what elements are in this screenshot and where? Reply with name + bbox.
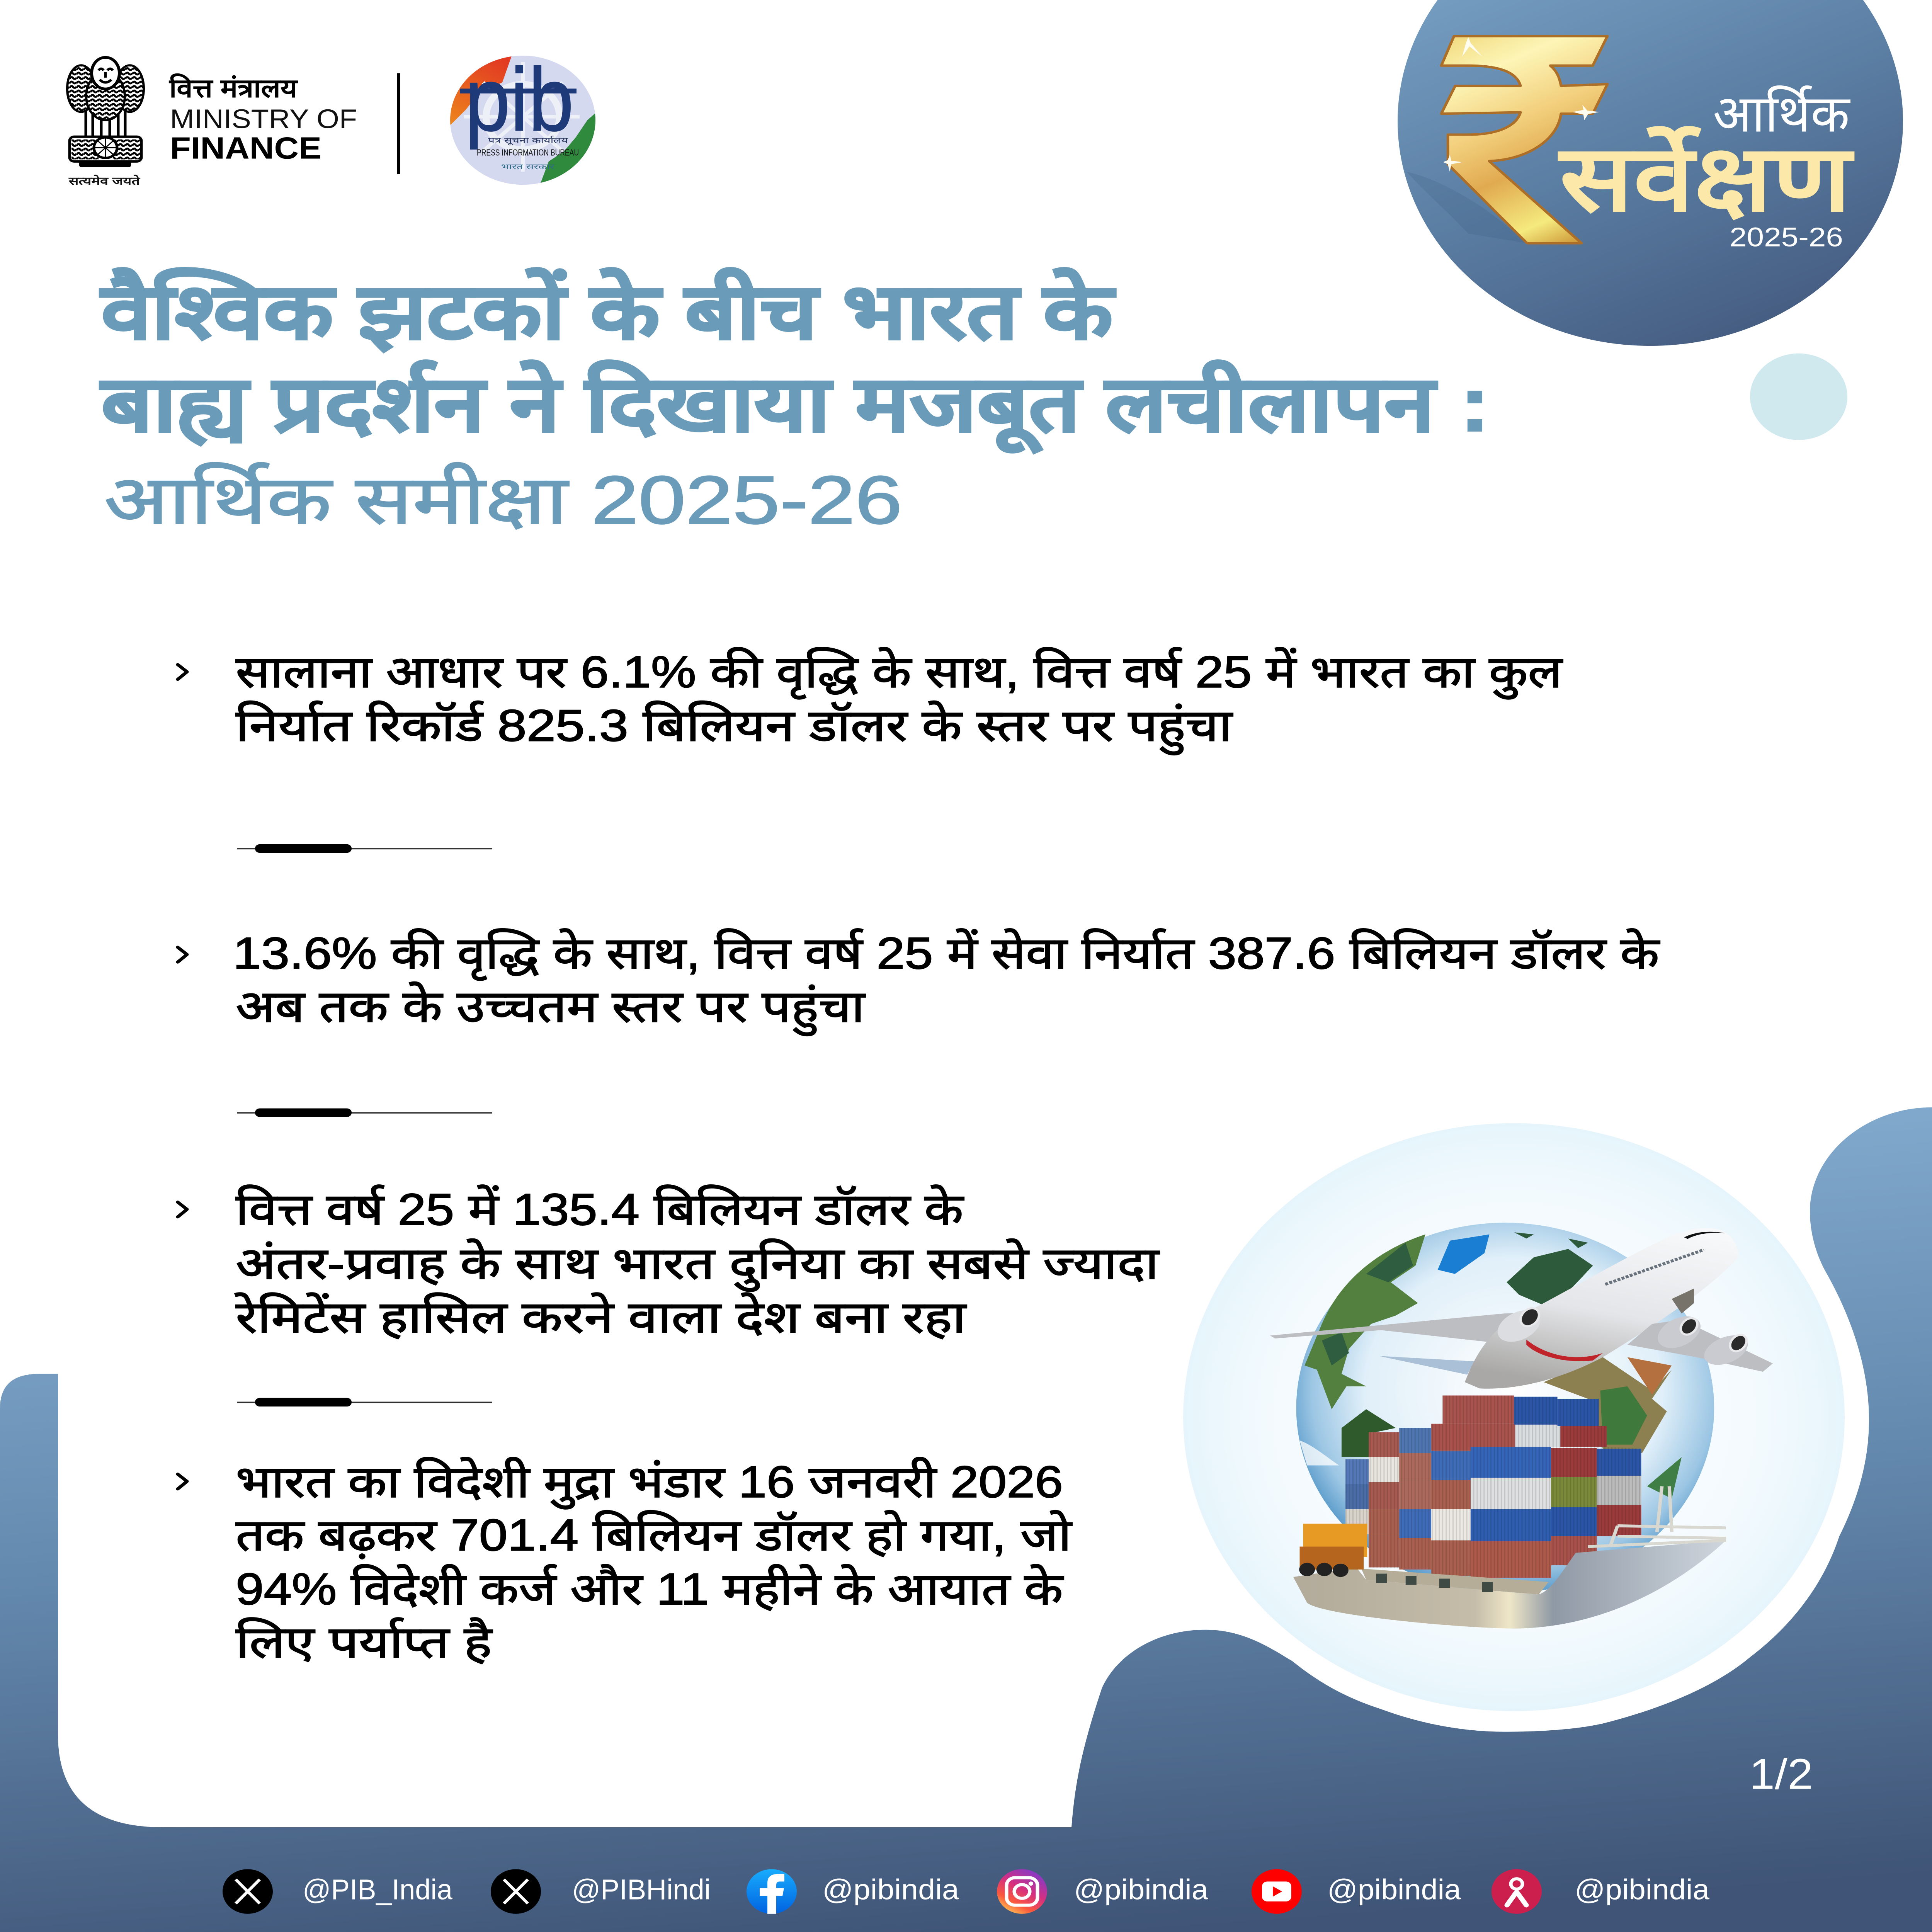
handle: @pibindia: @pibindia <box>1327 1873 1461 1906</box>
bullet 4: forex reserves: लिए पर्याप्त है <box>236 1617 493 1667</box>
text: PRESS INFORMATION BUREAU: PRESS INFORMATION BUREAU <box>477 148 579 158</box>
icon: globe <box>1296 1223 1714 1593</box>
decorative pale circle <box>1750 354 1847 440</box>
icon: facebook <box>747 1869 797 1914</box>
bullet 1: total exports: सालाना आधार पर 6.1% की वृद्धि के साथ, वित्त वर्ष 25 में भारत का कुल <box>236 647 1563 699</box>
footer: social handles <box>223 1869 1710 1914</box>
bullet 3: remittances: अंतर-प्रवाह के साथ भारत दुनिया का सबसे ज्यादा <box>236 1238 1160 1292</box>
bullet 4: forex reserves: तक बढ़कर 701.4 बिलियन डॉलर हो गया, जो <box>236 1510 1072 1560</box>
text: पत्र सूचना कार्यालय: पत्र सूचना कार्यालय <box>488 136 568 146</box>
icon: X <box>491 1869 541 1914</box>
bullet 3: remittances: रेमिटेंस हासिल करने वाला देश बना रहा <box>235 1293 967 1342</box>
bullet 2: services exports: 13.6% की वृद्धि के साथ, वित्त वर्ष 25 में सेवा निर्यात 387.6 बिलियन डॉलर के <box>233 928 1660 981</box>
text: सर्वेक्षण: सर्वेक्षण <box>1558 126 1855 231</box>
text: pib: pib <box>465 49 574 150</box>
icon: container ship <box>1293 1486 1726 1629</box>
title: बाह्य प्रदर्शन ने दिखाया मजबूत लचीलापन : <box>100 360 1490 454</box>
text: ministry name in Hindi: वित्त मंत्रालय <box>168 73 298 103</box>
title: वैश्विक झटकों के बीच भारत के <box>100 267 1116 355</box>
text: MINISTRY OF: MINISTRY OF <box>170 104 357 134</box>
logo: national emblem <box>67 57 144 167</box>
bullet 4: forex reserves: 94% विदेशी कर्ज और 11 महीने के आयात के <box>236 1564 1064 1614</box>
text: FINANCE: FINANCE <box>170 131 321 166</box>
top right circle badge: आर्थिक सर्वेक्षण <box>1398 0 1903 346</box>
text: आर्थिक: आर्थिक <box>1713 85 1851 143</box>
handle: @pibindia: @pibindia <box>1575 1873 1710 1906</box>
bullet 3: remittances: वित्त वर्ष 25 में 135.4 बिलियन डॉलर के <box>236 1184 964 1235</box>
icon: instagram <box>997 1869 1047 1914</box>
page number: 1/2 <box>1749 1750 1813 1798</box>
icon: youtube <box>1252 1869 1302 1914</box>
handle: @pibindia: @pibindia <box>1074 1873 1209 1906</box>
handle: @pibindia: @pibindia <box>822 1873 959 1906</box>
title <box>100 267 1490 538</box>
bullet 2: services exports: अब तक के उच्चतम स्तर पर पहुंचा <box>236 981 866 1036</box>
bullet 2: services exports <box>178 928 1660 1036</box>
bullet 1: total exports: निर्यात रिकॉर्ड 825.3 बिलियन डॉलर के स्तर पर पहुंचा <box>236 701 1233 755</box>
bullet 4: forex reserves: भारत का विदेशी मुद्रा भंडार 16 जनवरी 2026 <box>236 1457 1063 1509</box>
title: आर्थिक समीक्षा 2025-26 <box>104 462 902 538</box>
bullet 4: forex reserves <box>178 1457 1072 1667</box>
bullet 3: remittances <box>178 1184 1160 1342</box>
text: 2025-26: 2025-26 <box>1730 222 1843 252</box>
text: भारत सरकार: भारत सरकार <box>501 163 555 171</box>
icon: koo <box>1492 1869 1542 1914</box>
icon: X <box>223 1869 273 1914</box>
handle: @PIB_India: @PIB_India <box>303 1873 453 1906</box>
illustration: globe, airplane and container ship <box>1183 1123 1845 1711</box>
text: emblem motto: सत्यमेव जयते <box>68 175 141 187</box>
icon: airplane <box>1270 1228 1773 1389</box>
handle: @PIBHindi: @PIBHindi <box>572 1873 711 1906</box>
logo: press information bureau <box>450 56 595 185</box>
bottom gradient band with curved blobs <box>0 1107 1932 1932</box>
icon: gold rupee symbol <box>1406 36 1607 243</box>
icon: container stack <box>1345 1396 1641 1578</box>
bullet 1: total exports <box>178 647 1563 755</box>
